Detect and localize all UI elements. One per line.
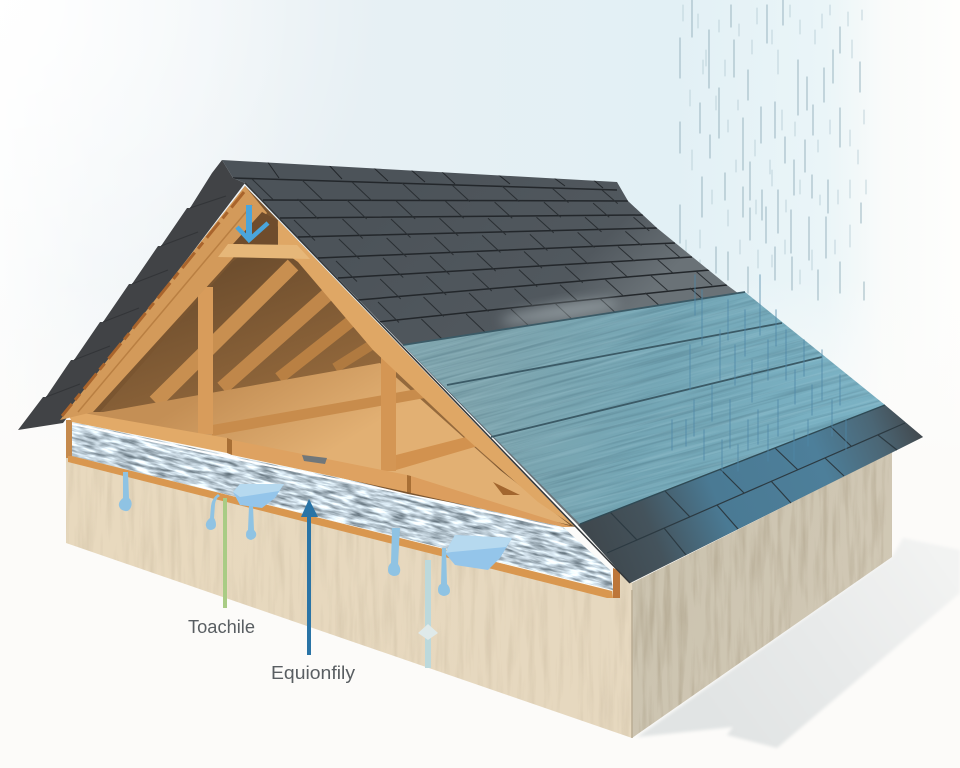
rafter edge stain — [62, 192, 244, 416]
blue arrow pointer — [301, 499, 318, 655]
tray 2 — [445, 535, 512, 570]
lower brace — [396, 436, 478, 470]
drip 3 — [246, 506, 256, 540]
drip 1 — [119, 472, 132, 511]
label: Toachile: Toachile — [188, 617, 255, 637]
drip 2 — [206, 494, 220, 530]
post left — [198, 287, 213, 434]
front beam 3 — [411, 476, 573, 527]
attic floor — [70, 363, 570, 525]
shingle row lines — [233, 161, 728, 343]
icon: blue ridge arrow — [237, 205, 268, 240]
water channel: wall trickle — [769, 517, 773, 566]
rafter groove — [78, 205, 252, 412]
latch — [302, 455, 327, 464]
drip 5 — [438, 548, 450, 596]
beam joint 2 — [407, 475, 411, 493]
front beam 2 — [232, 440, 407, 492]
insulation band — [72, 422, 613, 590]
dark floor slot — [493, 482, 520, 495]
right roof plane with shingles — [222, 160, 923, 583]
eave shingles — [578, 405, 923, 583]
beam joint — [227, 438, 232, 455]
ground shadow — [637, 538, 960, 748]
rain above the roof — [680, 0, 866, 300]
post right — [381, 353, 396, 471]
drip 4 — [388, 528, 400, 576]
right rafter — [278, 220, 575, 527]
attic backing — [70, 186, 575, 527]
collar tie — [218, 244, 310, 259]
apex block — [233, 212, 277, 244]
blue wet membrane — [403, 291, 886, 524]
front beam 1 — [66, 410, 227, 453]
wet highlight on shingles — [499, 295, 621, 329]
floor brace — [212, 388, 425, 436]
left rafter — [60, 186, 267, 420]
timber frame — [60, 186, 575, 527]
orange sill strip — [68, 456, 613, 598]
corner post — [613, 568, 620, 598]
attic interior — [100, 226, 500, 470]
interior rafters — [155, 265, 293, 402]
wall: front face — [60, 450, 640, 745]
left post — [66, 420, 72, 458]
wall: side face — [630, 450, 895, 740]
left roof plane — [18, 160, 245, 430]
roof edge line — [245, 183, 630, 583]
membrane strip lines — [403, 292, 822, 437]
green leader line — [223, 498, 227, 608]
tray 1 — [233, 484, 284, 508]
rain over the membrane — [672, 275, 846, 474]
label: Equionfily: Equionfily — [271, 663, 355, 683]
pale leader line — [418, 560, 438, 668]
leaks and drips — [119, 472, 512, 596]
